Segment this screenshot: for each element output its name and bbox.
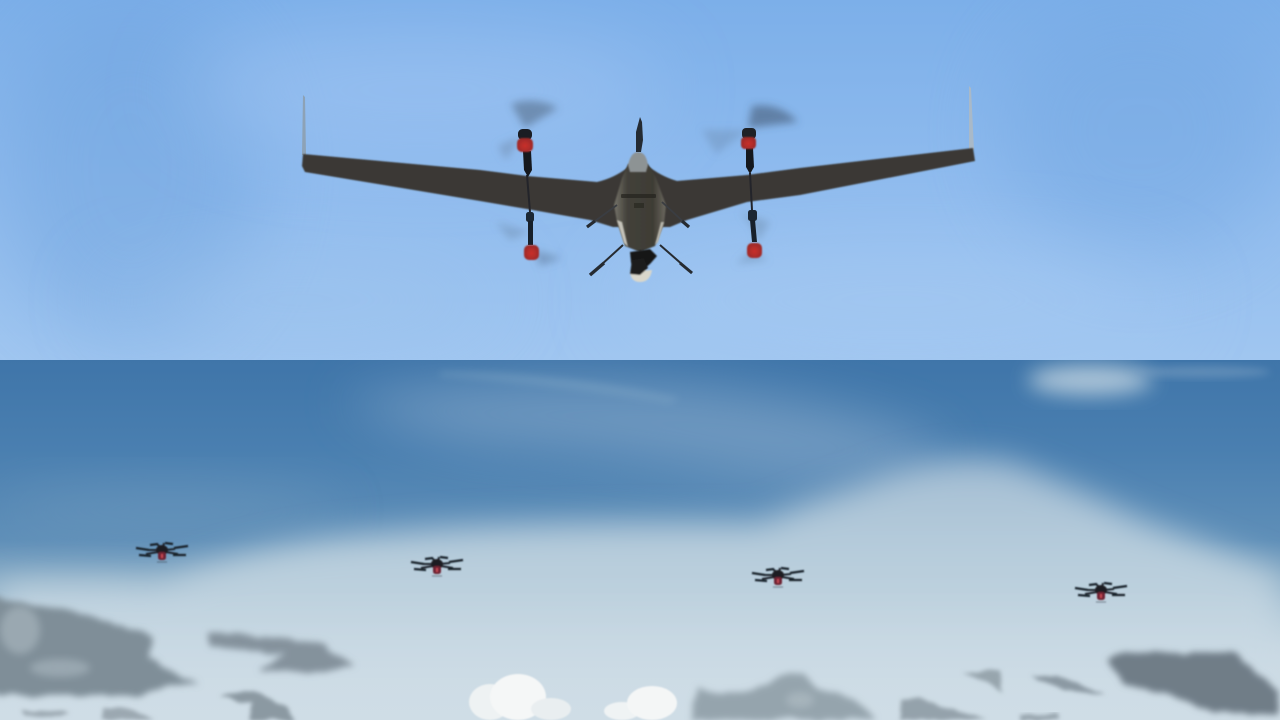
icon: antenna struts bbox=[590, 245, 623, 275]
icon: left motor boom bbox=[518, 129, 534, 245]
drone: quadcopter 4 bbox=[1075, 583, 1127, 602]
bright cloud bank bbox=[0, 438, 1280, 635]
drone: quadcopter 2 bbox=[411, 557, 463, 576]
icon: camera gimbal bbox=[630, 249, 657, 282]
cumulus clouds bottom centre bbox=[469, 673, 877, 720]
dark clouds bottom left bbox=[0, 595, 355, 720]
panel: lower sky with clouds bbox=[0, 360, 1280, 720]
drone: large VTOL fixed-wing bbox=[302, 86, 975, 282]
drone: quadcopter 1 bbox=[136, 543, 188, 562]
icon: main wing bbox=[302, 148, 975, 227]
dark clouds bottom right bbox=[901, 652, 1280, 720]
icon: wingtip fins bbox=[302, 95, 306, 155]
icon: nose cone and tail propeller bbox=[628, 152, 648, 172]
icon: fuselage bbox=[614, 164, 666, 252]
icon: red motor pods bbox=[517, 137, 762, 260]
icon: right motor boom bbox=[742, 128, 757, 242]
icon: propeller blur bbox=[496, 101, 798, 266]
panel: upper sky bbox=[0, 0, 1280, 360]
high wispy clouds bbox=[153, 360, 1267, 506]
drone: quadcopter 3 bbox=[752, 568, 804, 587]
